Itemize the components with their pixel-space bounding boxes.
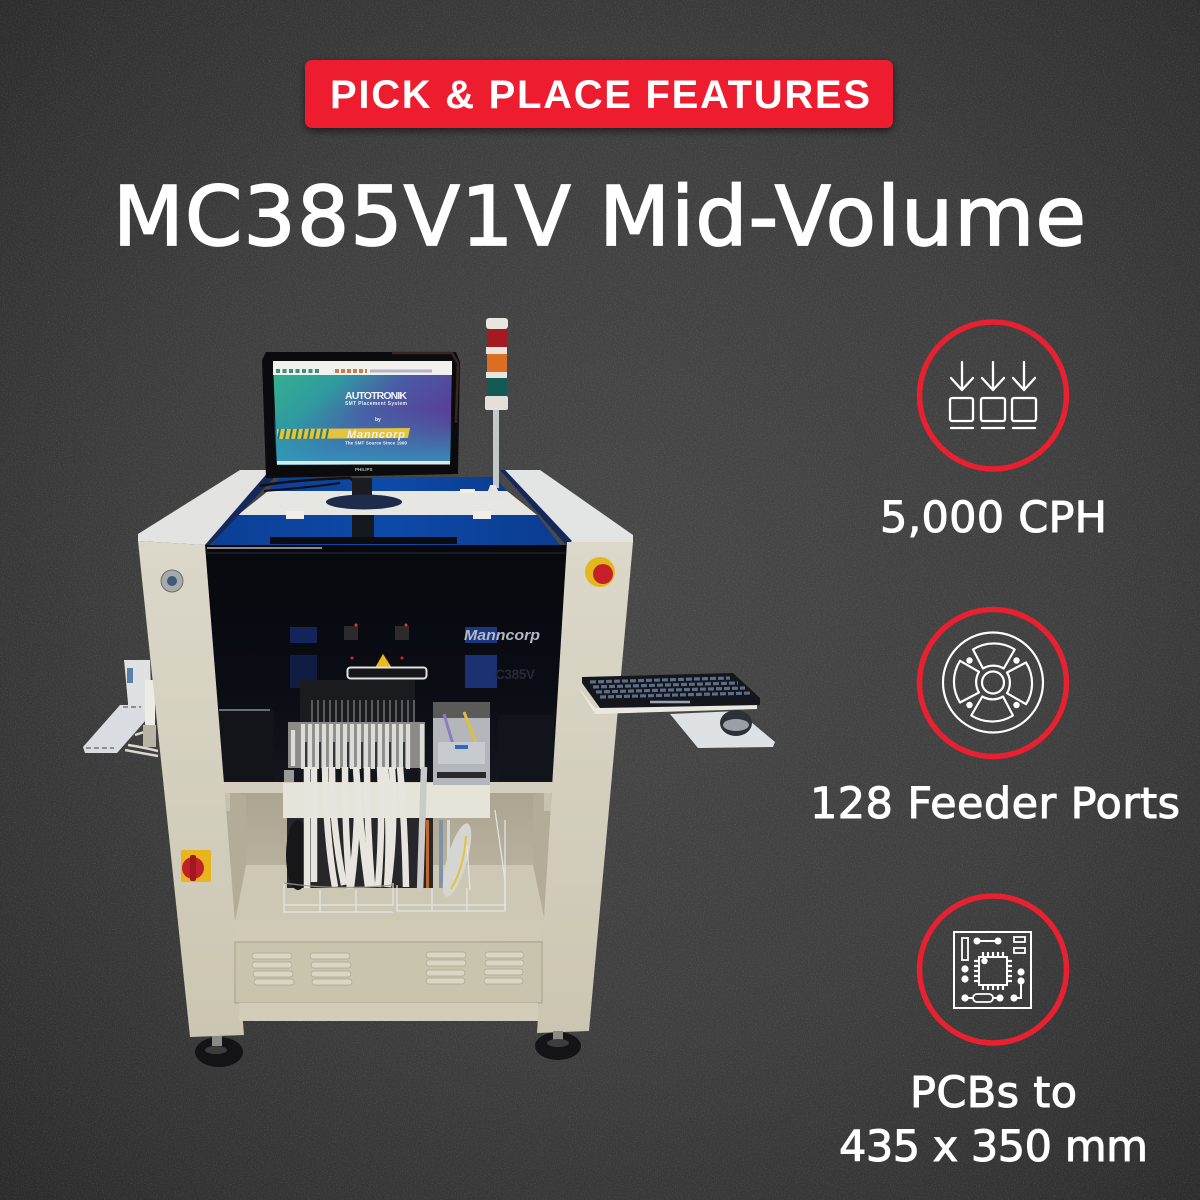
icon: feeder wheel bbox=[943, 632, 1043, 732]
label line one: PCBs to bbox=[910, 1068, 1077, 1118]
monitor screen bbox=[273, 361, 452, 465]
icon: arrows placing components bbox=[950, 362, 1036, 428]
red ring bbox=[920, 896, 1066, 1043]
left column bbox=[138, 541, 244, 1037]
tape strips bbox=[307, 767, 424, 892]
machine photo illustration bbox=[83, 318, 775, 1067]
model text on window: C385V bbox=[495, 667, 535, 682]
red ring bbox=[920, 610, 1066, 756]
intelligent feeder module bbox=[433, 702, 490, 785]
feature: PCBs to 435 x 350 mm bbox=[839, 896, 1148, 1172]
side black panels bbox=[219, 710, 554, 781]
keyboard and mouse shelf bbox=[578, 673, 775, 748]
red ring bbox=[920, 322, 1066, 469]
feature: 5,000 CPH bbox=[880, 322, 1107, 543]
badge: pick and place features bbox=[305, 60, 893, 128]
top rails and glass deck bbox=[138, 470, 633, 545]
warning triangle bbox=[372, 653, 395, 672]
monitor brand: PHILIPS bbox=[355, 467, 373, 472]
head white handle bbox=[348, 668, 426, 678]
left board conveyor arm bbox=[83, 660, 158, 756]
signal tower light bbox=[478, 318, 509, 499]
label: 5,000 CPH bbox=[880, 493, 1107, 543]
screen subheading: SMT Placement System bbox=[345, 401, 408, 407]
badge: pick and place features: PICK & PLACE FEATURES bbox=[330, 73, 870, 117]
label line two: 435 x 350 mm bbox=[839, 1122, 1148, 1172]
vent slots bbox=[252, 952, 524, 985]
screen by line: by bbox=[375, 417, 381, 423]
feeder tray bbox=[283, 783, 490, 818]
icon: circuit board bbox=[954, 932, 1031, 1008]
right column bbox=[537, 542, 633, 1033]
front dark window bbox=[205, 545, 567, 782]
screen heading: AUTOTRONIK bbox=[345, 390, 407, 402]
emergency stop button bbox=[585, 557, 615, 587]
ledge below window bbox=[222, 782, 552, 811]
rear body fill bbox=[205, 545, 567, 1021]
component reels bbox=[286, 818, 477, 899]
label: 128 Feeder Ports bbox=[810, 779, 1180, 829]
panel indicator bbox=[161, 570, 183, 592]
lower cabinet panel bbox=[233, 920, 545, 1021]
clear reel bins bbox=[284, 810, 505, 912]
interior lower cavity bbox=[224, 790, 552, 924]
screen tagline: The SMT Source Since 1990 bbox=[345, 440, 407, 446]
leveling feet bbox=[195, 1031, 581, 1067]
feeder bank bbox=[284, 680, 425, 798]
brand text on window: Manncorp bbox=[464, 627, 540, 644]
main power switch bbox=[181, 850, 211, 882]
feature: 128 feeder ports bbox=[810, 610, 1180, 829]
title: MC385V1V Mid-Volume bbox=[113, 170, 1086, 265]
monitor bbox=[260, 352, 460, 510]
screen logo: Manncorp bbox=[347, 429, 405, 441]
